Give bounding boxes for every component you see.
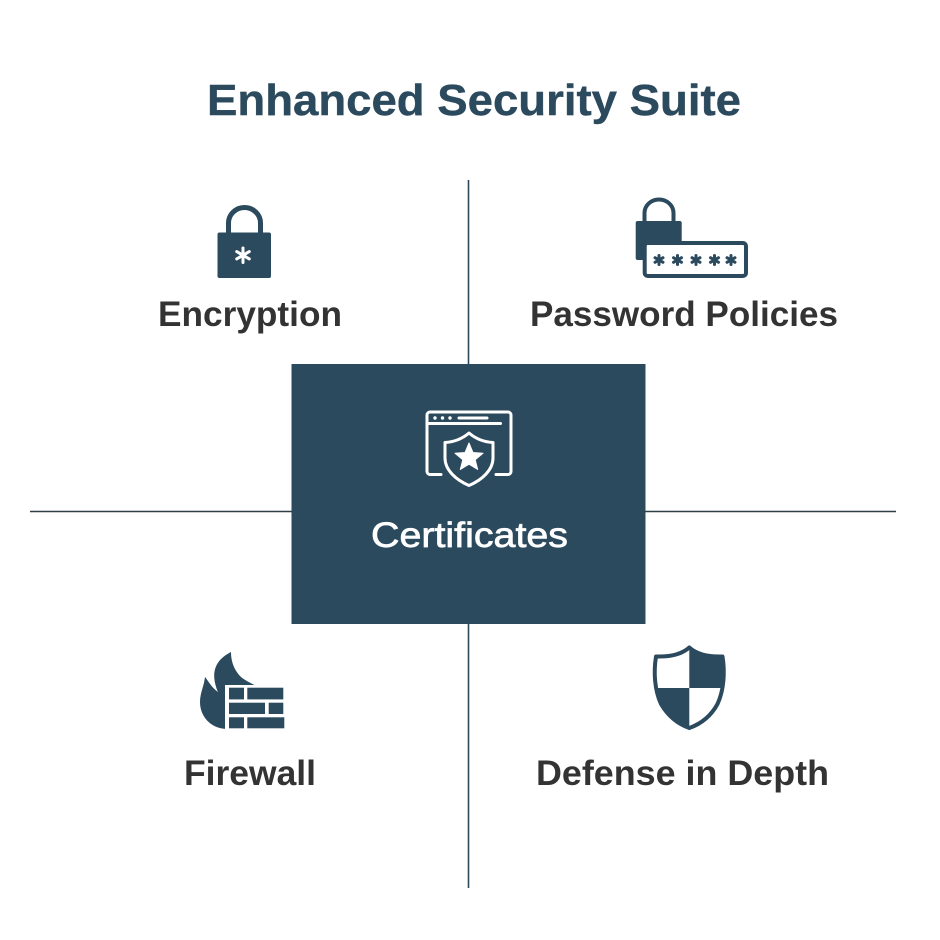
label: encryption: Encryption [158,295,342,334]
title: Enhanced Security Suite [207,76,741,125]
icon: quartered shield [655,648,724,728]
label: password policies: Password Policies [530,295,838,334]
panel: certificates [292,364,646,624]
label: defense in depth: Defense in Depth [536,754,829,793]
panel: defense in depth [536,648,829,793]
label: certificates: Certificates [371,516,568,555]
panel: password policies [530,200,838,334]
center box [292,364,646,624]
panel: encryption [158,208,342,334]
icon: flame behind brick wall [200,652,286,730]
icon: browser window with shield [427,412,511,486]
icon: padlock with asterisk [218,208,271,278]
label: firewall: Firewall [184,754,316,793]
panel: firewall [184,652,316,793]
icon: padlock with password field [636,200,746,276]
